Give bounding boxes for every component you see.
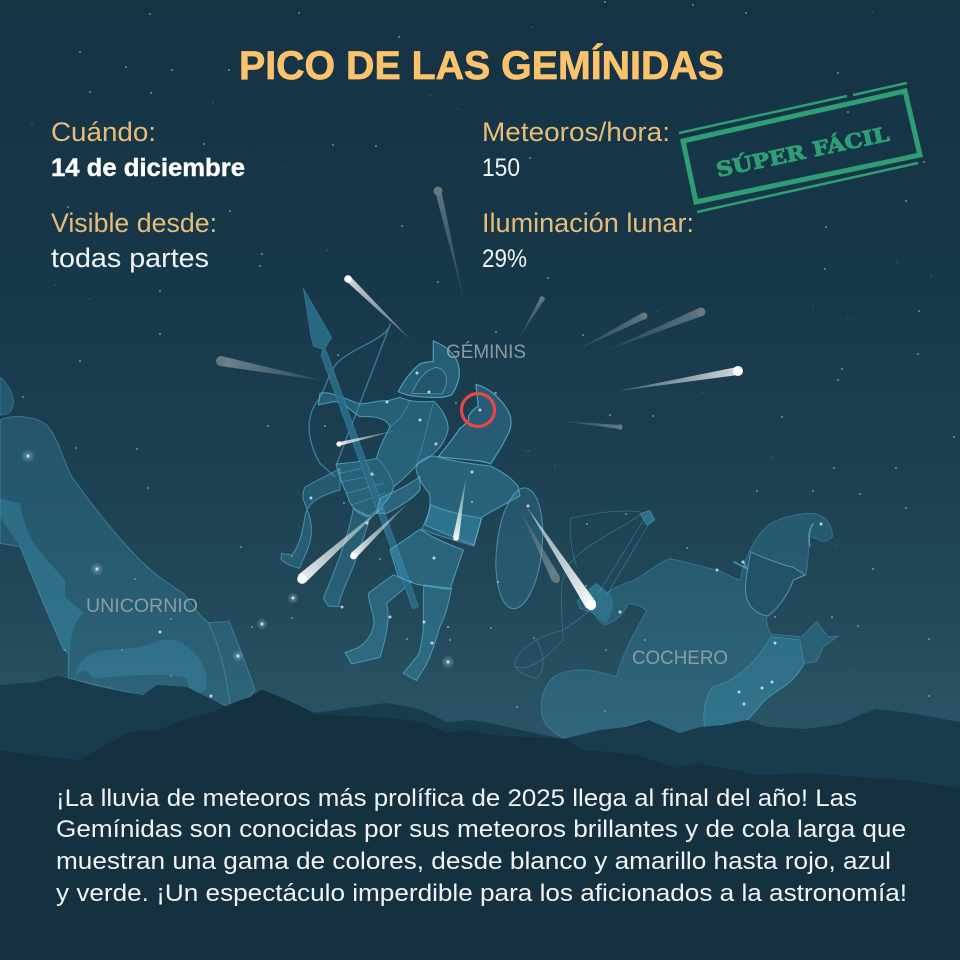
label: Unicornio: UNICORNIO <box>86 596 198 617</box>
label: Géminis: GÉMINIS <box>446 342 526 363</box>
spear <box>303 288 419 609</box>
constellation stars <box>28 373 821 704</box>
description paragraph: Gemínidas son conocidas por sus meteoros brillantes y de cola larga que <box>56 816 906 843</box>
unicorn body <box>0 417 255 707</box>
right twin right leg <box>403 585 452 681</box>
unicorn lighter neck band <box>0 498 83 677</box>
right twin skirt <box>390 529 463 589</box>
description paragraph: muestran una gama de colores, desde blanco y amarillo hasta rojo, azul <box>56 848 891 875</box>
info: iluminación lunar: Iluminación lunar: <box>482 208 694 238</box>
mountains: back ridge <box>0 676 960 960</box>
meteor 12 <box>453 478 466 541</box>
meteor 13 <box>527 507 596 610</box>
left twin front leg <box>323 508 370 607</box>
meteor 5 <box>575 312 648 351</box>
unicorn head <box>0 377 14 415</box>
left twin back leg <box>281 468 340 568</box>
meteor 6 <box>605 308 706 351</box>
description paragraph <box>56 785 907 907</box>
left twin torso, skirt and arm <box>318 393 448 517</box>
right twin extended arm <box>377 477 420 513</box>
left twin armor and skirt details <box>339 400 433 505</box>
info: meteoros por hora: 150 <box>482 154 520 182</box>
description paragraph: y verde. ¡Un espectáculo imperdible para los aficionados a la astronomía! <box>56 880 907 907</box>
meteor 14 <box>520 510 560 583</box>
left twin helmet visor <box>412 367 446 394</box>
right twin torso <box>416 456 520 545</box>
info: visible desde: todas partes <box>51 243 209 273</box>
meteor 3 <box>216 356 325 381</box>
constellation: Géminis <box>281 288 548 681</box>
radiant marker circle <box>462 394 494 426</box>
constellation: Cochero <box>515 511 838 739</box>
stamp text: SÚPER FÁCIL <box>714 121 891 182</box>
info: meteoros por hora <box>482 117 670 182</box>
constellation labels <box>86 342 728 669</box>
meteor 2 <box>344 275 411 340</box>
left twin bow <box>309 323 391 477</box>
right twin shield <box>490 486 548 611</box>
star glows <box>21 449 455 669</box>
constellation: Unicornio <box>0 377 255 707</box>
info: iluminación lunar <box>482 208 694 273</box>
label: Cochero: COCHERO <box>632 648 728 669</box>
meteor 7 <box>618 366 743 391</box>
unicorn leg band <box>75 640 207 693</box>
whip and reins <box>515 511 653 678</box>
left twin helmet <box>398 341 459 397</box>
meteors <box>216 186 743 610</box>
info: iluminación lunar: 29% <box>482 245 527 273</box>
stamp outer rules <box>679 83 918 212</box>
whip handle <box>640 511 655 525</box>
info: visible desde: Visible desde: <box>51 208 217 238</box>
sky stars <box>23 2 954 711</box>
meteor 9 <box>336 430 398 447</box>
meteor 10 <box>297 505 385 584</box>
info: visible desde <box>51 208 217 273</box>
right twin belt <box>422 505 482 546</box>
mountains: front ridge <box>0 690 960 960</box>
info: cuándo: Cuándo: <box>51 117 156 147</box>
charioteer body <box>541 513 838 739</box>
charioteer hat detail <box>733 523 813 568</box>
info: meteoros por hora: Meteoros/hora: <box>482 117 670 147</box>
meteor 4 <box>518 296 545 340</box>
description paragraph: ¡La lluvia de meteoros más prolífica de 2025 llega al final del año! Las <box>56 785 857 812</box>
charioteer arm highlight <box>704 637 804 728</box>
stamp: súper fácil <box>679 83 920 212</box>
stamp frame <box>683 91 920 202</box>
meteor 1 <box>434 186 465 305</box>
info: cuándo: 14 de diciembre <box>51 154 245 182</box>
charioteer helmet shading <box>746 552 805 616</box>
right twin helmet and neck <box>438 384 511 464</box>
meteor 11 <box>350 503 408 559</box>
title: PICO DE LAS GEMÍNIDAS <box>239 43 724 88</box>
right twin left leg <box>345 575 412 664</box>
charioteer hand at whip <box>580 583 613 624</box>
meteor 8 <box>560 421 623 430</box>
info: cuándo <box>51 117 245 182</box>
unicorn rear leg <box>208 623 230 705</box>
